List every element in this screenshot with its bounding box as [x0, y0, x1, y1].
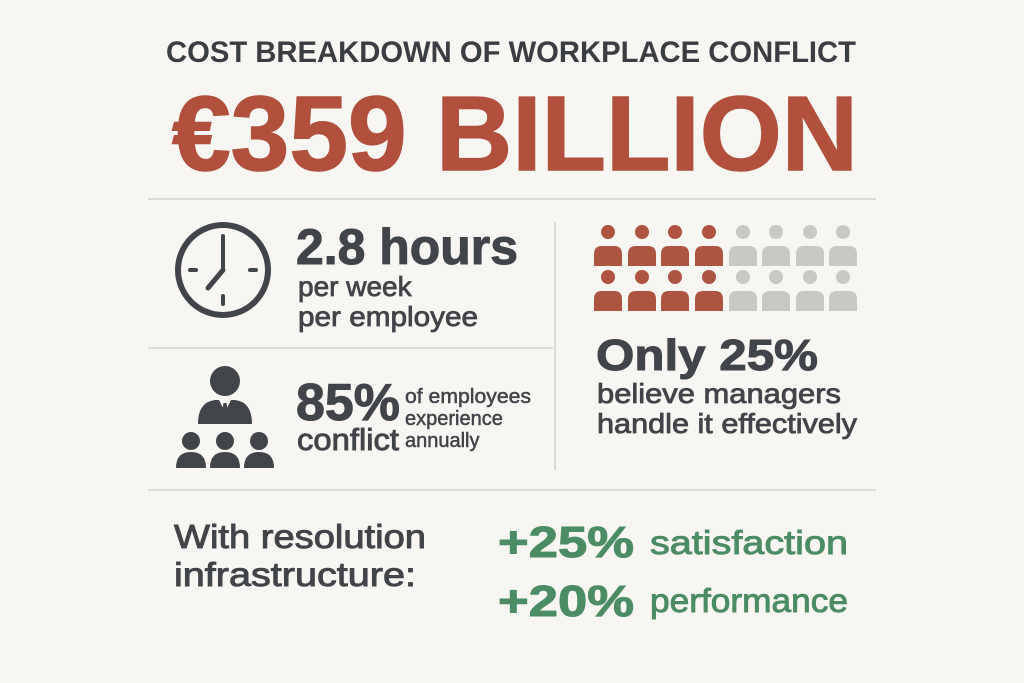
text: only 25%: believe managers — [597, 378, 841, 409]
stats: green gains: performance — [650, 582, 848, 619]
text: 85%: 85% — [296, 374, 400, 432]
stats: green gains: +20% — [498, 577, 634, 626]
panel: 85% — [176, 366, 531, 468]
text: 85%: experience — [405, 408, 503, 430]
stats: green gains: satisfaction — [650, 524, 848, 561]
text: 2.8 hours: per week — [298, 271, 413, 302]
text: with resolution infrastructure: With resolution — [174, 518, 426, 555]
panel: managers — [594, 225, 857, 439]
stats: green gains: +25% — [498, 518, 634, 567]
text: 85%: annually — [405, 430, 480, 452]
text: 85%: of employees — [405, 386, 531, 408]
icon: manager with team — [176, 366, 274, 468]
title: COST BREAKDOWN OF WORKPLACE CONFLICT — [166, 36, 856, 69]
text: only 25%: Only 25% — [596, 331, 818, 380]
panel: resolution benefits — [174, 518, 848, 626]
text: 2.8 hours: 2.8 hours — [296, 219, 518, 275]
icon: clock — [178, 225, 268, 315]
icon: people grid — [594, 225, 857, 311]
text: only 25% — [596, 331, 857, 439]
text: only 25%: handle it effectively — [597, 408, 857, 439]
text: with resolution infrastructure: infrastructure: — [174, 556, 416, 593]
text: 2.8 hours: per employee — [298, 301, 478, 332]
text: with resolution infrastructure — [174, 518, 426, 593]
text: 85% — [296, 374, 531, 457]
text: 85%: conflict — [297, 422, 399, 457]
text: 2.8 hours — [296, 219, 518, 332]
panel: hours — [178, 219, 518, 332]
headline figure: €359 BILLION — [172, 75, 858, 193]
stats: green gains — [498, 518, 848, 626]
